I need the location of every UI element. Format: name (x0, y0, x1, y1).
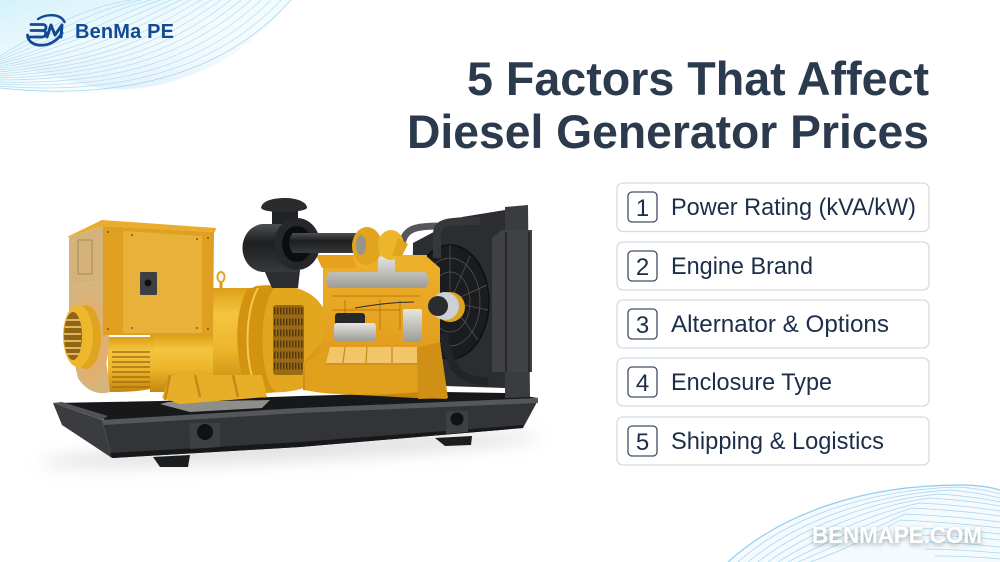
factor 2 (617, 242, 929, 290)
starter motor (334, 313, 376, 341)
title: 5 Factors That Affect (467, 52, 929, 105)
ground shadow (40, 426, 540, 474)
factor 2: 2 (636, 254, 649, 281)
factor list (617, 183, 929, 465)
factor 4: Enclosure Type (671, 369, 832, 396)
stator grille (273, 305, 304, 375)
alternator housing (150, 272, 334, 393)
engine block (303, 255, 465, 399)
terminal box (67, 220, 270, 412)
factor 3: Alternator & Options (671, 311, 889, 338)
belt alternator (428, 292, 465, 322)
factor 4: 4 (636, 370, 649, 397)
lifting eye (220, 281, 222, 290)
radiator (402, 205, 532, 398)
radiator fan (411, 245, 489, 359)
vented end bell (63, 280, 154, 393)
background wave: top left (0, 0, 291, 94)
factor 5: Shipping & Logistics (671, 428, 884, 455)
coolant hoses (402, 226, 440, 244)
air filter and intake (242, 198, 361, 288)
icon: BM emblem (28, 15, 64, 45)
website watermark: BENMAPE.COM (812, 522, 982, 548)
turbocharger (352, 227, 408, 265)
mount feet (153, 455, 190, 467)
title (407, 52, 929, 158)
factor 1 (617, 183, 929, 232)
factor 4 (617, 358, 929, 406)
factor 3: 3 (636, 312, 649, 339)
logo wordmark: BenMa PE (75, 21, 174, 43)
base frame (53, 392, 538, 467)
alternator foot (160, 400, 270, 412)
illustration: diesel generator (40, 198, 540, 474)
logo: BenMa PE (28, 15, 174, 45)
factor 5 (617, 417, 929, 465)
exhaust manifold (326, 256, 429, 288)
factor 1: 1 (636, 195, 649, 222)
factor 5: 5 (636, 429, 649, 456)
background wave: bottom right (728, 485, 1000, 562)
factor 3 (617, 300, 929, 348)
factor 2: Engine Brand (671, 253, 813, 280)
factor 1: Power Rating (kVA/kW) (671, 194, 916, 221)
title: Diesel Generator Prices (407, 105, 929, 158)
oil filter (403, 309, 422, 342)
